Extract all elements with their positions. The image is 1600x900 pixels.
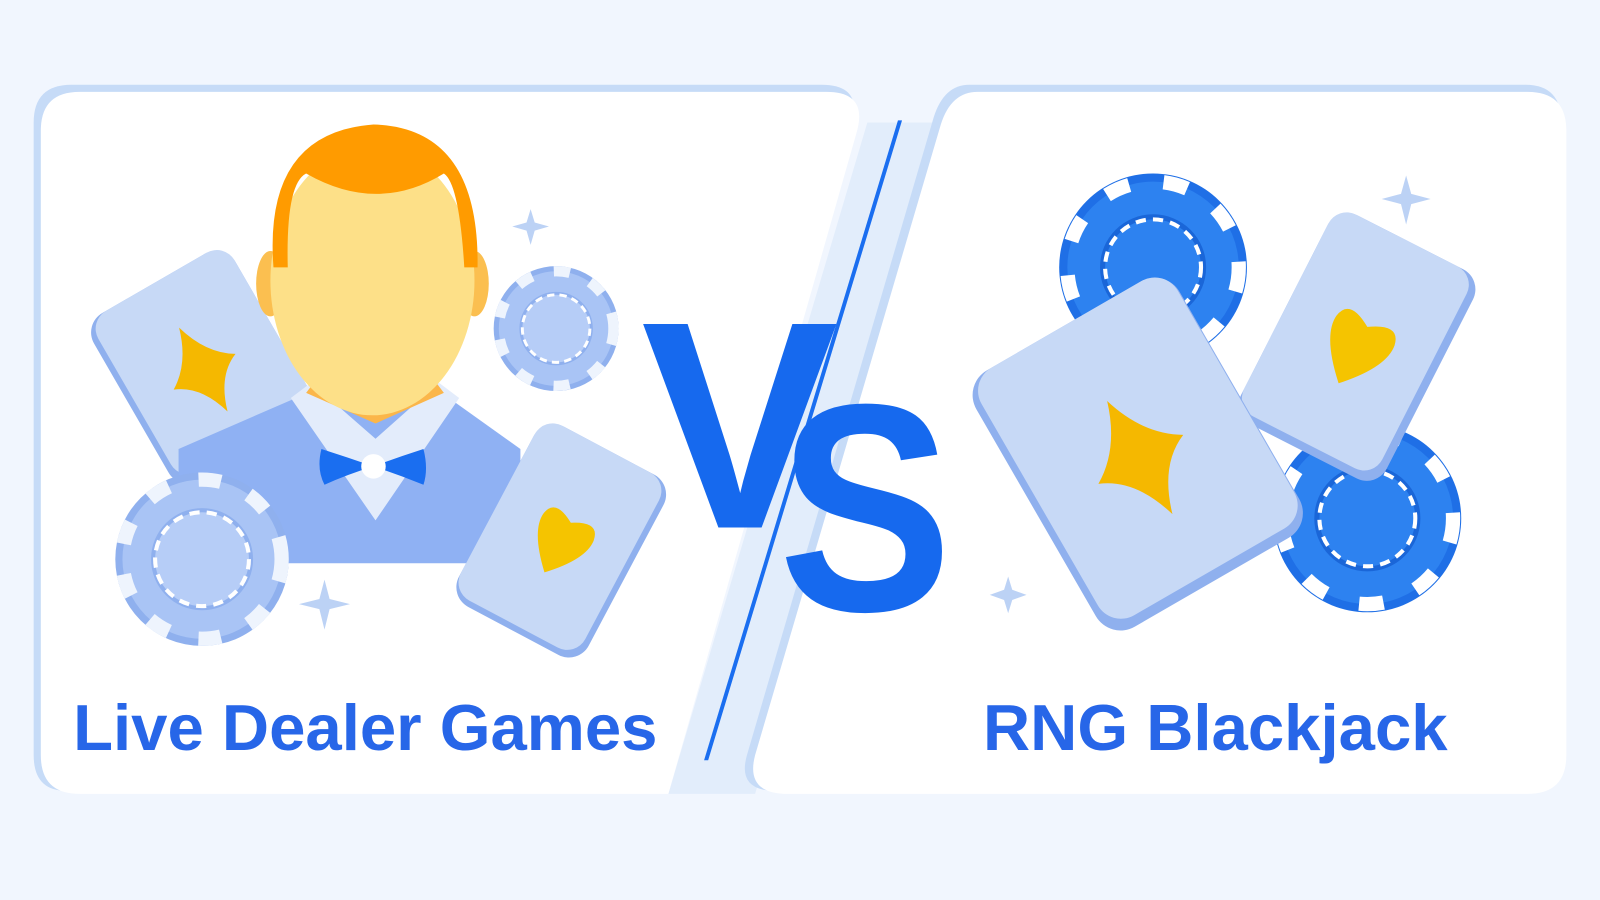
illustration: dealer	[83, 124, 674, 665]
slash line	[704, 120, 902, 760]
body	[179, 398, 520, 563]
card left	[83, 243, 321, 492]
chip bottom left	[115, 472, 289, 646]
ears	[256, 251, 285, 316]
diagonal band	[668, 122, 949, 794]
VS	[641, 260, 952, 674]
card right	[448, 416, 674, 665]
big card	[962, 267, 1313, 641]
hair	[273, 124, 478, 267]
head	[270, 146, 474, 415]
illustration: rng cards and chips	[962, 173, 1483, 641]
VS: V	[641, 260, 840, 591]
sparkles	[512, 209, 549, 245]
title: live dealer games: Live Dealer Games	[73, 691, 658, 764]
title: rng blackjack: RNG Blackjack	[983, 691, 1448, 764]
chip top right	[494, 266, 619, 391]
VS: S	[778, 344, 952, 674]
panel: rng blackjack	[745, 85, 1566, 794]
panel: live dealer	[34, 85, 859, 794]
bowtie	[319, 449, 426, 485]
card back right	[1231, 205, 1483, 489]
